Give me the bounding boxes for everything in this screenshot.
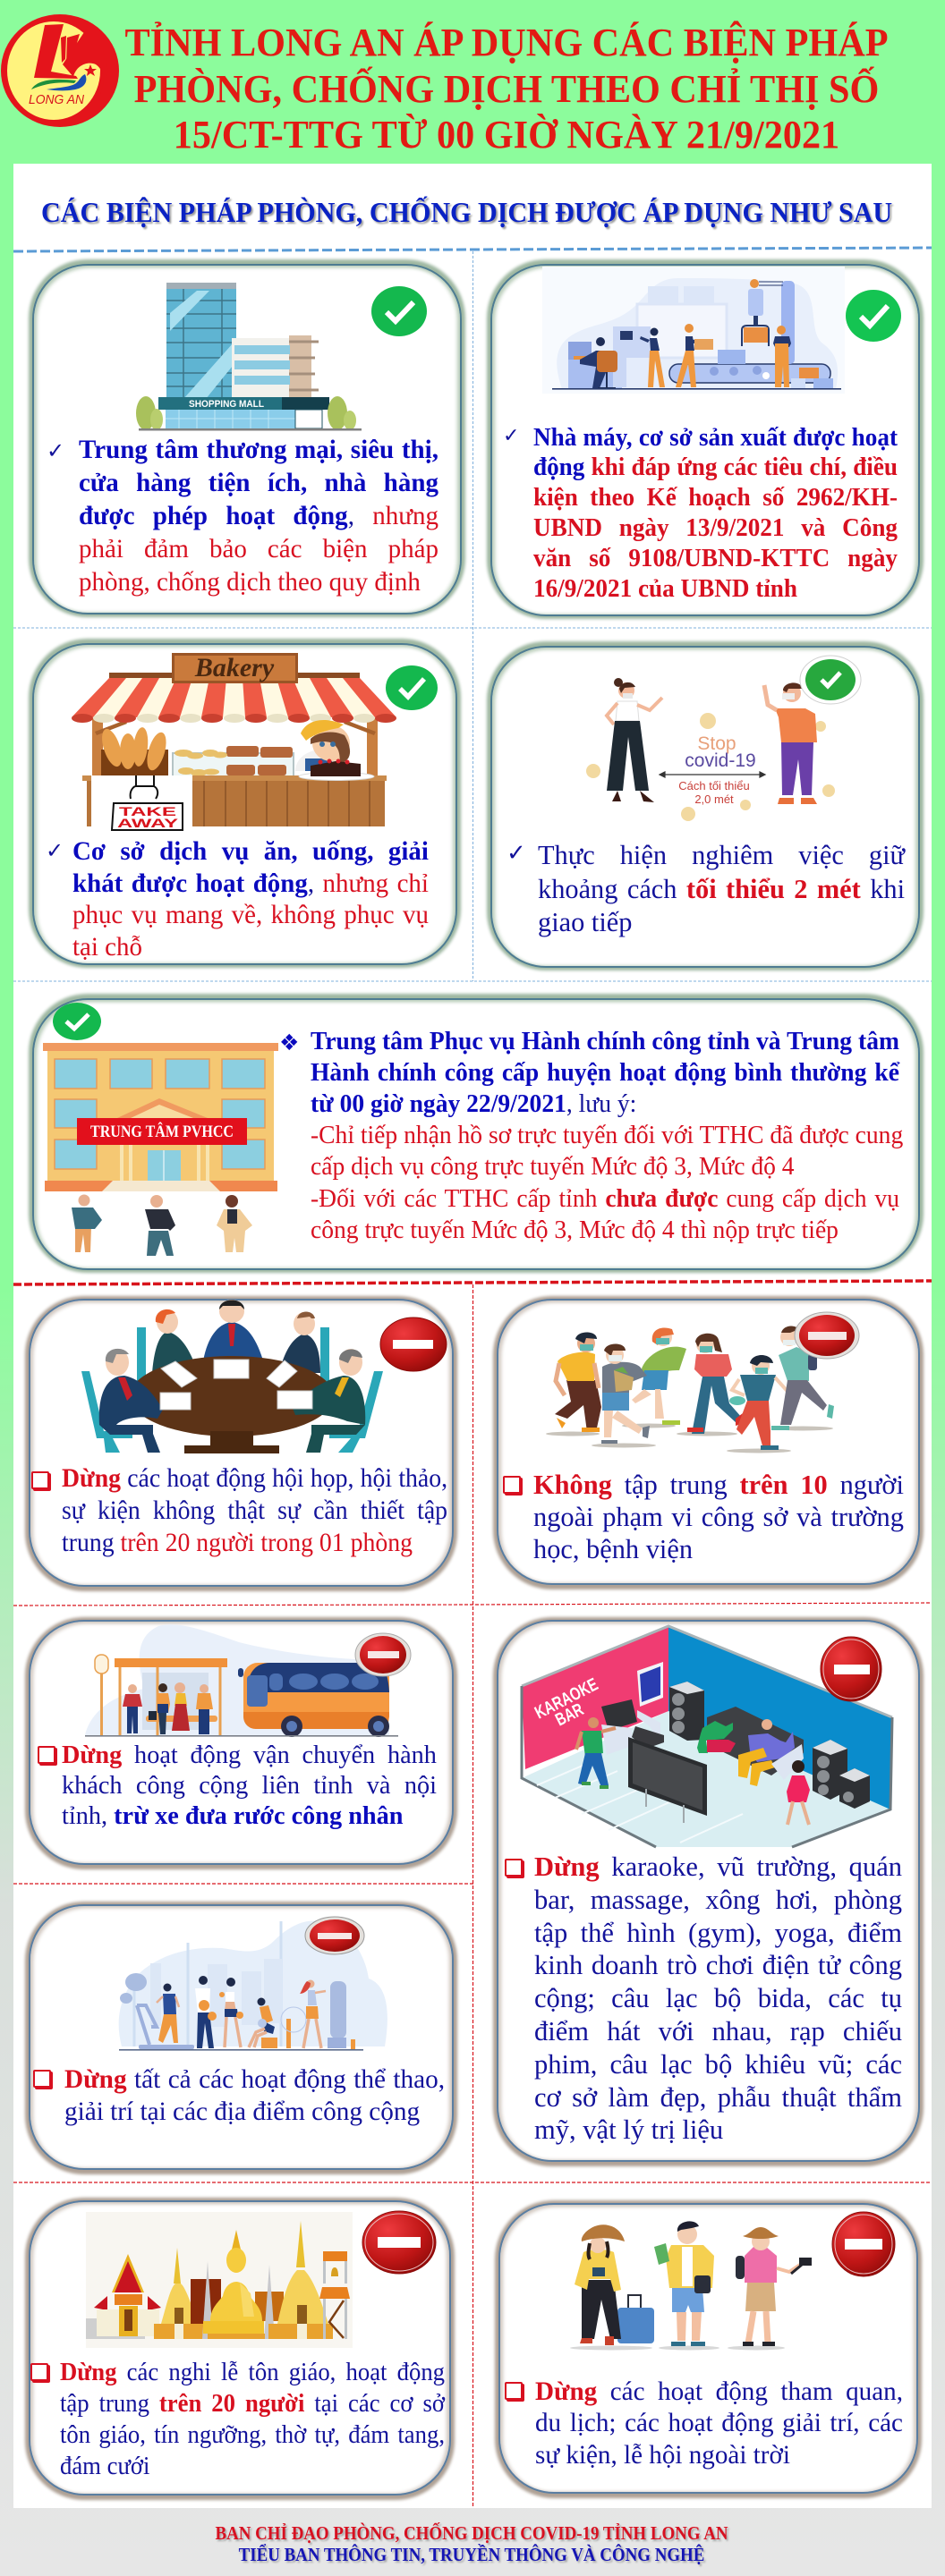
text: transport rule: khách công cộng liên tỉnh và nội [62,1771,437,1800]
text: transport rule: Dừng hoạt động vận chuyển hành [62,1741,437,1769]
bullet tick: ✓ [46,838,64,863]
text: administration centre rule [311,1027,903,1244]
illustration: two people keeping distance [586,655,861,821]
panel: stop public transport [23,1615,459,1869]
text: food service rule: tại chỗ [72,932,142,962]
bullet diamond: ❖ [279,1030,299,1055]
text: factory rule: Nhà máy, cơ sở sản xuất được hoạt [533,424,898,452]
text: factory rule: động khi đáp ứng các tiêu chí, điều [533,453,898,481]
illustration: two people keeping distance: Cách tối thiểu [678,779,750,792]
text: food service rule [72,836,429,962]
text: meeting rule: Dừng các hoạt động hội họp, hội thảo, [62,1463,447,1493]
illustration: gym people [118,1916,387,2051]
illustration: factory line [542,267,901,390]
text: factory rule: UBND ngày 13/9/2021 và Công [533,514,898,542]
bullet box [503,1476,521,1494]
text: karaoke rule: phim, câu lạc bộ khiêu vũ; các [534,2048,902,2080]
panel: no gatherings [491,1294,925,1589]
text: religious rule: Dừng các nghi lễ tôn giáo, hoạt động [60,2358,445,2386]
panel: stop meetings [23,1294,459,1591]
text: shopping mall rule: Trung tâm thương mại, siêu thị, [79,435,438,464]
illustration: people walking with masks [546,1311,859,1453]
icon: no entry sign [821,1637,881,1701]
illustration: bakery stall [72,653,438,831]
text: factory rule: 16/9/2021 của UBND tỉnh [533,575,797,603]
illustration: shopping mall [136,283,427,431]
text: karaoke rule: kinh doanh trò chơi điện tử công [534,1949,902,1980]
title: TỈNH LONG AN ÁP DỤNG CÁC BIỆN PHÁP [124,21,889,64]
panel: public administration centre [27,994,925,1275]
text: karaoke rule: tập thể hình (gym), yoga, điểm [534,1917,902,1948]
panel: keep distance [485,641,925,972]
text: administration centre rule: Hành chính công cấp huyện hoạt động bình thường kể [311,1058,899,1087]
text: tourism rule: Dừng các hoạt động tham quan, [535,2377,903,2406]
panel: stop tourism [493,2199,924,2498]
illustration: bus stop and bus [85,1624,412,1737]
text: factory rule [533,424,898,603]
bullet tick: ✓ [503,425,519,447]
illustration: two people keeping distance: covid-19 [685,750,756,771]
icon: no entry sign [305,1917,364,1954]
text: meeting rule [62,1463,447,1557]
icon: no entry sign [362,2211,436,2274]
text: transport rule: tỉnh, trừ xe đưa rước công nhân [62,1801,404,1830]
text: religious rule: đám cưới [60,2452,149,2480]
bullet tick: ✓ [507,840,526,867]
icon: green check sticker [800,656,861,704]
footer credits: BAN CHỈ ĐẠO PHÒNG, CHỐNG DỊCH COVID-19 TỈNH LONG AN [216,2522,728,2544]
title: PHÒNG, CHỐNG DỊCH THEO CHỈ THỊ SỐ [134,66,879,111]
bullet box [31,1471,49,1489]
illustration: administration building [43,1003,278,1256]
text: distance rule [538,839,906,937]
illustration: bakery stall: Bakery [194,653,275,682]
text: meeting rule: trung trên 20 người trong 01 phòng [62,1528,413,1557]
icon: no entry sign [832,2212,895,2276]
text: karaoke rule: Dừng karaoke, vũ trường, quán [534,1851,902,1882]
text: shopping mall rule: phải đảm bảo các biện pháp [79,534,438,564]
panel: stop karaoke and entertainment [491,1615,925,2166]
footer credits [215,2522,730,2567]
illustration: bakery stall: AWAY [117,816,179,830]
illustration: administration building: TRUNG TÂM PVHCC [90,1122,234,1141]
bullet tick: ✓ [47,438,64,463]
text: administration centre rule: -Chỉ tiếp nhận hồ sơ trực tuyến đối với TTHC đã được cung [311,1121,903,1149]
panel: shopping mall allowed [27,259,467,619]
text: administration centre rule: -Đối với các TTHC cấp tỉnh chưa được cung cấp dịch vụ [311,1184,899,1213]
text: administration centre rule: Trung tâm Phục vụ Hành chính công tỉnh và Trung tâm [311,1027,899,1055]
bullet box [38,1746,55,1764]
text: gathering rule [533,1469,904,1564]
bullet box [30,2363,48,2381]
icon: no entry sign [355,1633,411,1676]
icon: green check [386,665,438,710]
text: shopping mall rule: cửa hàng tiện ích, nhà hàng [79,468,438,497]
text: meeting rule: sự kiện không thật sự cần thiết tập [62,1496,447,1525]
text: distance rule: giao tiếp [538,906,632,937]
section heading: CÁC BIỆN PHÁP PHÒNG, CHỐNG DỊCH ĐƯỢC ÁP DỤNG NHƯ SAU [41,196,892,228]
text: gathering rule: ngoài phạm vi công sở và trường [533,1501,904,1532]
text: food service rule: khát được hoạt động, nhưng chỉ [72,869,429,898]
text: karaoke rule [534,1851,902,2145]
text: shopping mall rule: được phép hoạt động, nhưng [79,501,438,530]
text: factory rule: kiện theo Kế hoạch số 2962/KH- [533,484,898,512]
text: karaoke rule: điểm hát với nhau, rạp chiếu [534,2015,902,2046]
text: sports rule: giải trí tại các địa điểm công cộng [64,2097,420,2126]
panel: stop religious gatherings [23,2196,456,2500]
text: administration centre rule: cấp dịch vụ công trực tuyến Mức độ 3, Mức độ 4 [311,1152,795,1181]
icon: green check [371,286,427,336]
text: sports rule: Dừng tất cả các hoạt động thể thao, [64,2064,445,2094]
text: karaoke rule: bar, massage, xông hơi, phòng [534,1884,902,1915]
text: distance rule: Thực hiện nghiêm việc giữ [538,839,905,870]
text: tourism rule: sự kiện, lễ hội ngoài trời [535,2440,790,2470]
text: religious rule [60,2358,446,2480]
text: religious rule: tôn giáo, tín ngưỡng, thờ tự, đám tang, [60,2420,445,2449]
illustration: meeting table [81,1300,447,1453]
illustration: two people keeping distance: Stop [697,733,736,754]
logo: Long An emblem [1,14,119,127]
text: factory rule: văn số 9108/UBND-KTTC ngày [533,545,898,572]
bullet box [33,2070,51,2088]
text: karaoke rule: cộng; câu lạc bộ bida, các tụ [534,1982,902,2013]
text: karaoke rule: cơ sở làm đẹp, phẫu thuật thẩm [534,2081,902,2113]
logo: Long An emblem: LONG AN [29,92,84,107]
illustration: karaoke bar room: BAR [552,1699,587,1730]
text: tourism rule [535,2377,903,2470]
text: shopping mall rule: phòng, chống dịch theo quy định [79,567,421,597]
icon: no entry sign [380,1318,447,1371]
panel: factories allowed [485,259,925,621]
illustration: temple and Buddha [86,2211,437,2348]
bullet box [505,1859,523,1877]
illustration: two people keeping distance: 2,0 mét [694,792,734,806]
panel: stop sports [23,1900,459,2174]
panel: food service allowed [27,639,463,970]
text: tourism rule: du lịch; các hoạt động giải trí, các [535,2408,903,2437]
illustration: bakery stall: TAKE [119,804,176,818]
icon: no entry sign [795,1312,859,1359]
illustration: karaoke bar room [521,1624,893,1848]
text: religious rule: tập trung trên 20 người tại các cơ sở [60,2389,445,2418]
text: administration centre rule: công trực tuyến Mức độ 3, Mức độ 4 thì nộp trực tiếp [311,1216,839,1244]
icon: green check [53,1003,101,1040]
icon: green check [846,290,901,342]
title [124,21,889,157]
text: food service rule: phục vụ mang về, không phục vụ [72,900,429,929]
illustration: shopping mall: SHOPPING MALL [189,399,264,410]
text: sports rule [64,2064,445,2126]
text: administration centre rule: từ 00 giờ ngày 22/9/2021, lưu ý: [311,1089,636,1118]
text: gathering rule: học, bệnh viện [533,1533,693,1564]
text: distance rule: khoảng cách tối thiểu 2 mét khi [538,873,905,904]
text: food service rule: Cơ sở dịch vụ ăn, uống, giải [72,836,429,866]
title: 15/CT-TTG TỪ 00 GIỜ NGÀY 21/9/2021 [174,113,839,157]
text: karaoke rule: mỹ, vật lý trị liệu [534,2114,723,2145]
illustration: karaoke bar room: KARAOKE [532,1674,601,1723]
text: transport rule [62,1741,437,1830]
text: shopping mall rule [79,435,438,597]
illustration: three tourists [570,2211,895,2351]
text: gathering rule: Không tập trung trên 10 người [533,1469,904,1499]
bullet box [505,2382,523,2400]
footer credits: TIỂU BAN THÔNG TIN, TRUYỀN THÔNG VÀ CÔNG NGHỆ [239,2544,704,2565]
